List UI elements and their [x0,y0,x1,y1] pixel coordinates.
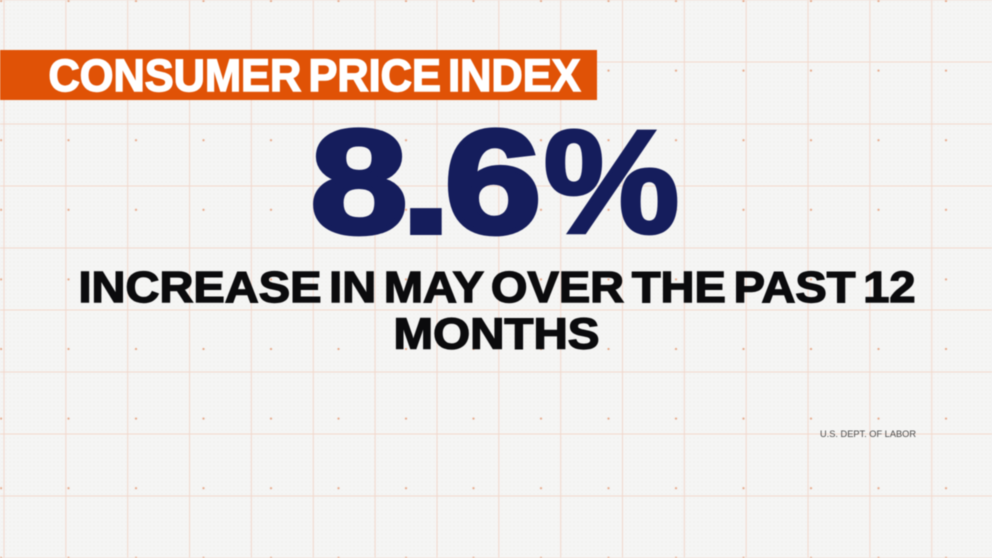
big number: 8.6%: . [401,100,451,264]
description text: MONTHS [394,310,600,358]
source label: U.S. DEPT. OF LABOR [820,429,916,440]
big number: 8.6% [310,100,680,264]
big number: 8.6%: 6 [444,100,542,264]
big number: 8.6%: % [544,100,680,264]
description text: INCREASE IN MAY OVER THE PAST 12 [78,263,915,312]
title banner: CONSUMER PRICE INDEX [48,50,580,101]
big number: 8.6%: 8 [310,100,408,264]
description text [78,263,915,358]
